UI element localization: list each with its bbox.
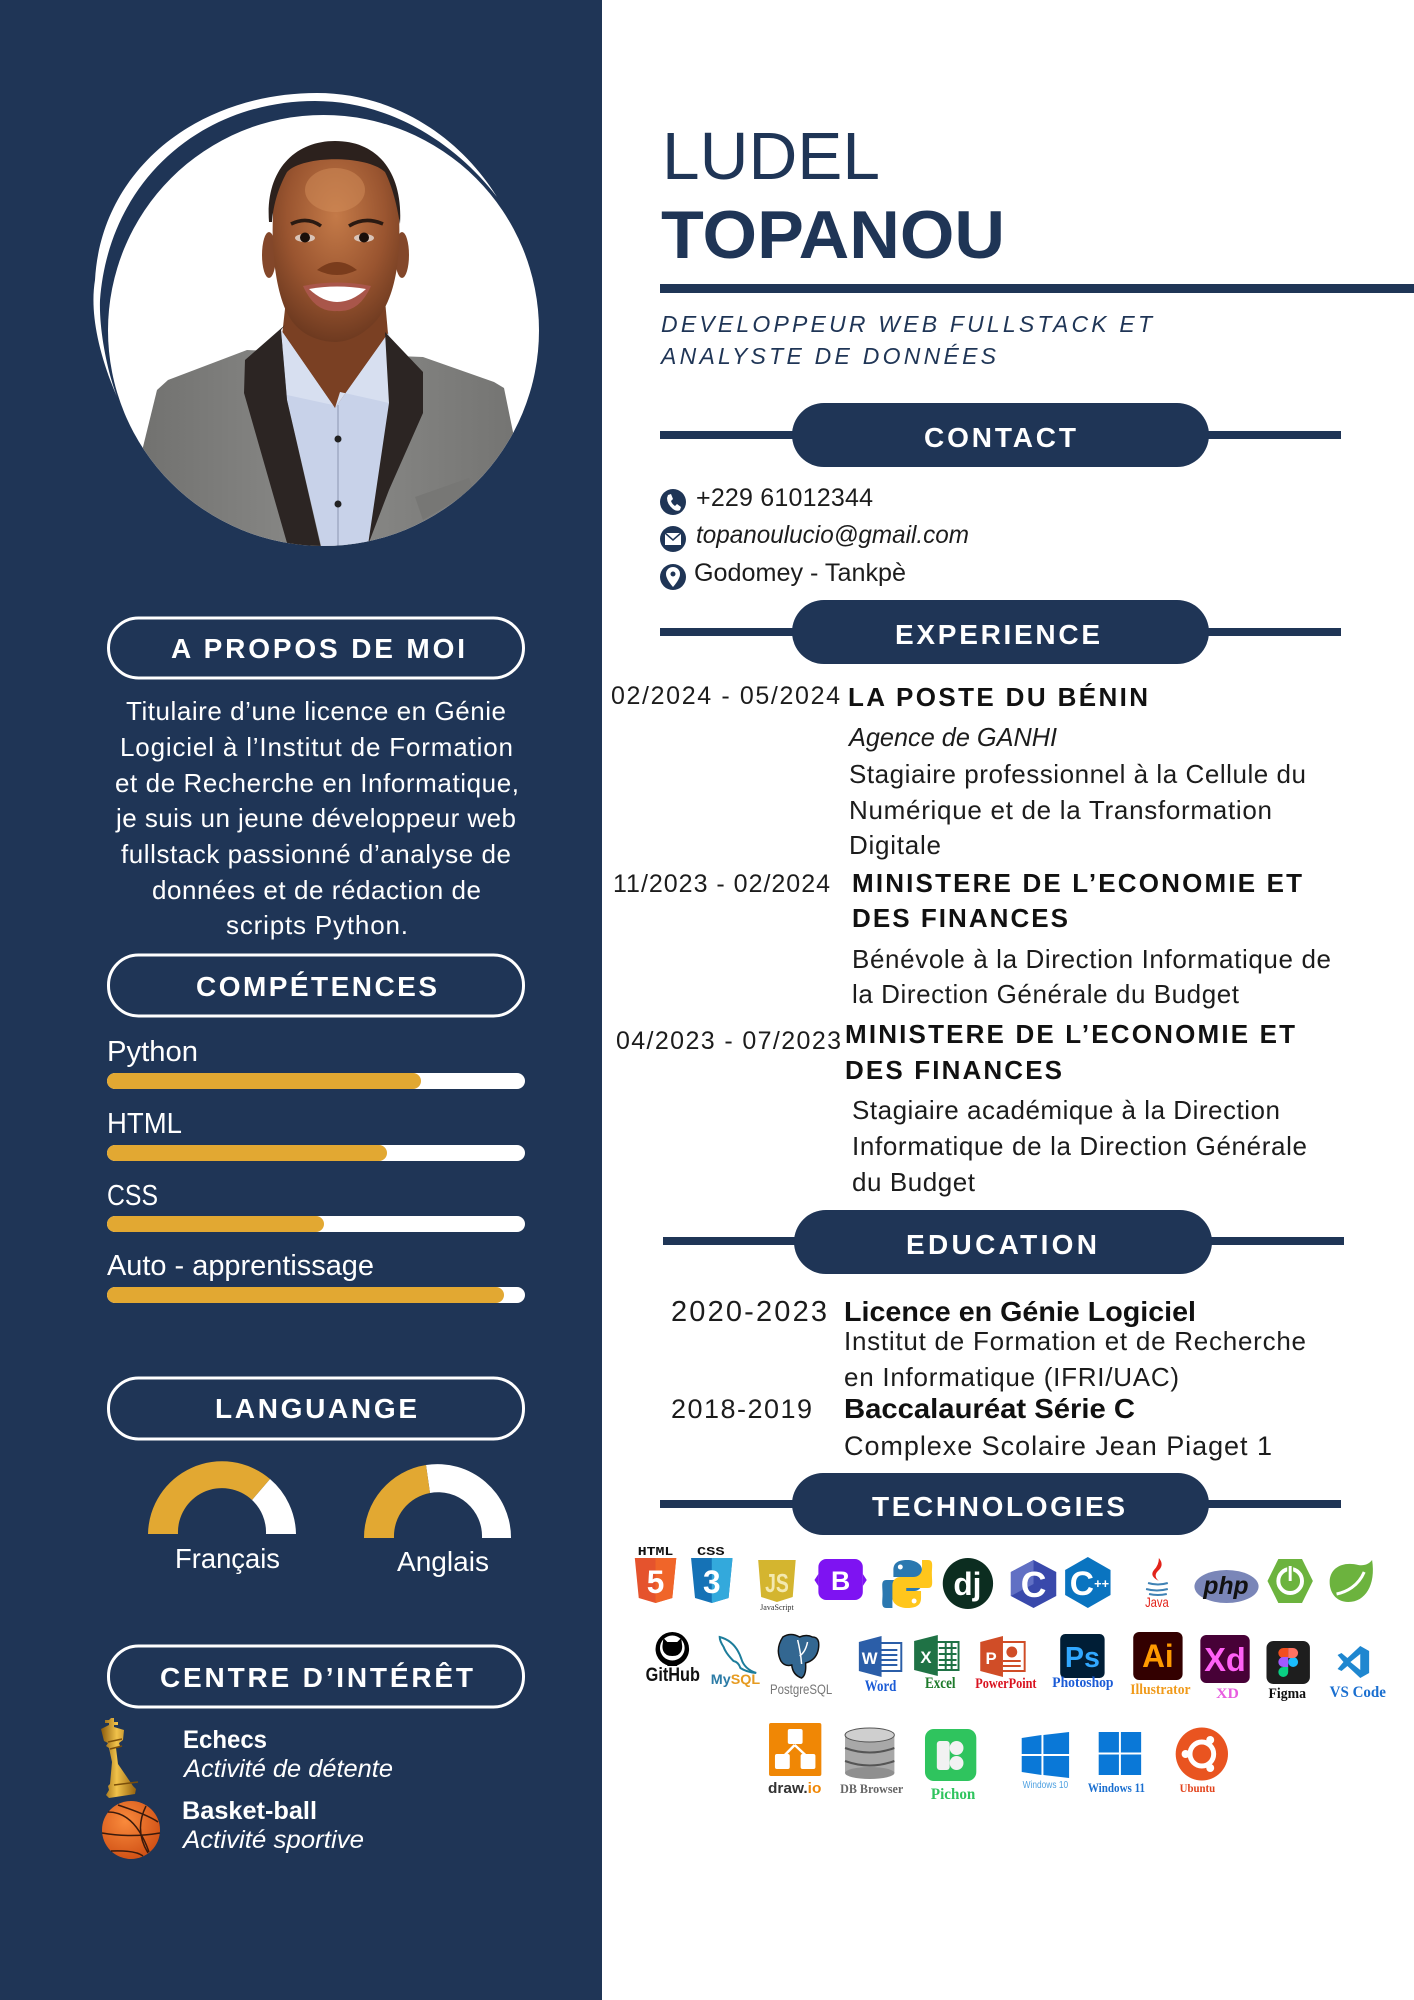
icon: Java: Java [1145, 1594, 1169, 1610]
text block: a propos: je suis un jeune développeur web [115, 803, 516, 833]
title: name [661, 119, 1005, 273]
icon: basketball [102, 1801, 160, 1859]
section band: technologies [660, 1473, 1341, 1535]
icon: C++ [1065, 1557, 1111, 1608]
icon: C [1011, 1560, 1056, 1608]
experience: ministere benevole: Bénévole à la Direction Informatique de [852, 944, 1331, 974]
heading: a propos de moi [108, 618, 524, 678]
skill: HTML [107, 1108, 525, 1161]
skill: auto-apprentissage: Auto - apprentissage [107, 1250, 374, 1282]
icon: draw.io [768, 1723, 821, 1797]
divider under name [660, 284, 1414, 293]
education: licence: en Informatique (IFRI/UAC) [844, 1362, 1179, 1392]
icon: PowerPoint [975, 1636, 1037, 1692]
skill bars [107, 1036, 525, 1303]
heading: a propos de moi: A PROPOS DE MOI [171, 633, 465, 664]
experience: ministere stagiaire: du Budget [852, 1167, 976, 1197]
interest: basket-ball: Activité sportive [181, 1826, 364, 1854]
technology logos [635, 1545, 1386, 1803]
experience: ministere benevole: 11/2023 - 02/2024 [613, 870, 830, 898]
icon: C++: C [1070, 1565, 1094, 1603]
heading: centre d'interet: CENTRE D’INTÉRÊT [160, 1662, 473, 1693]
icon: HTML5: HTML [638, 1545, 673, 1559]
icon: chess king [101, 1718, 138, 1798]
icon: HTML5: 5 [647, 1564, 664, 1600]
icon: Django [943, 1558, 993, 1609]
gauge: francais: Français [175, 1543, 280, 1574]
decorative crescent ring [93, 93, 497, 397]
experience: la poste du benin [611, 682, 1306, 860]
icon: draw.io: draw.io [768, 1781, 821, 1797]
experience: ministere stagiaire: Informatique de la Direction Générale [852, 1131, 1307, 1161]
experience: ministere benevole: la Direction Générale du Budget [852, 979, 1240, 1009]
icon: Bootstrap [814, 1559, 867, 1600]
icon: Photoshop: Photoshop [1052, 1675, 1114, 1691]
icon: Bootstrap: B [831, 1566, 850, 1596]
interest: echecs: Activité de détente [182, 1755, 393, 1783]
experience: ministere benevole [613, 868, 1331, 1009]
icon: JavaScript: JS [765, 1570, 789, 1598]
icon: GitHub [646, 1632, 700, 1685]
icon: DB Browser [840, 1728, 904, 1796]
icon: Word: W [862, 1649, 878, 1668]
icon: PHP [1194, 1570, 1259, 1603]
contact: email: topanoulucio@gmail.com [696, 521, 969, 549]
icon: MySQL [711, 1637, 761, 1687]
icon: Django: dj [953, 1566, 981, 1602]
icon: PowerPoint: PowerPoint [975, 1676, 1037, 1692]
heading: languange: LANGUANGE [215, 1393, 417, 1424]
education: licence: 2020-2023 [671, 1296, 827, 1328]
experience: ministere stagiaire [616, 1019, 1307, 1197]
subtitle [659, 311, 1154, 369]
icon: GitHub: GitHub [646, 1664, 700, 1685]
title: name: TOPANOU [661, 197, 1005, 273]
text block: a propos: fullstack passionné d’analyse de [121, 839, 511, 869]
section band: experience [660, 600, 1341, 664]
experience: la poste du benin: 02/2024 - 05/2024 [611, 682, 840, 710]
icon: Illustrator: Illustrator [1130, 1682, 1191, 1698]
icon: Python [882, 1560, 932, 1608]
text block: a propos: Titulaire d’une licence en Génie [126, 696, 506, 726]
education: baccalaureat: Complexe Scolaire Jean Piaget 1 [844, 1431, 1272, 1461]
experience: la poste du benin: Numérique et de la Transformation [849, 795, 1272, 825]
icon: Illustrator: Ai [1142, 1638, 1174, 1674]
education: baccalaureat: 2018-2019 [671, 1394, 812, 1424]
text block: a propos: scripts Python. [226, 910, 408, 940]
section band: contact [660, 403, 1341, 467]
icon: Java [1145, 1558, 1169, 1610]
icon: Spring Boot [1267, 1559, 1313, 1603]
icon: Photoshop: Ps [1065, 1642, 1100, 1674]
subtitle: ANALYSTE DE DONNÉES [659, 343, 997, 369]
experience: ministere stagiaire: 04/2023 - 07/2023 [616, 1027, 841, 1055]
icon: Excel [914, 1635, 959, 1692]
icon: Figma: Figma [1268, 1686, 1306, 1702]
text block: a propos [115, 696, 519, 940]
icon: VS Code [1330, 1646, 1386, 1701]
education: baccalaureat: Baccalauréat Série C [844, 1393, 1135, 1424]
contact: phone: +229 61012344 [696, 484, 873, 512]
profile photo [93, 93, 555, 560]
section band: technologies: TECHNOLOGIES [872, 1491, 1125, 1522]
icon: Adobe XD [1200, 1635, 1250, 1702]
interest: echecs: Echecs [183, 1726, 267, 1754]
text block: a propos: données et de rédaction de [152, 875, 481, 905]
skill: Python: Python [107, 1036, 198, 1068]
experience: la poste du benin: Agence de GANHI [847, 722, 1057, 752]
icon: Ubuntu: Ubuntu [1180, 1781, 1215, 1795]
experience: ministere stagiaire: Stagiaire académique à la Direction [852, 1095, 1280, 1125]
icon: JavaScript [758, 1560, 796, 1612]
title: name: LUDEL [662, 119, 880, 194]
education: licence [671, 1296, 1306, 1392]
photo circle with portrait [108, 115, 539, 546]
icon: Excel: Excel [925, 1675, 956, 1692]
icon: Pichon [925, 1729, 976, 1803]
education: licence: Institut de Formation et de Recherche [844, 1326, 1306, 1356]
icon: Windows 11: Windows 11 [1088, 1780, 1145, 1795]
section band: contact: CONTACT [924, 422, 1076, 453]
gauge: anglais: Anglais [397, 1546, 489, 1577]
experience: la poste du benin: LA POSTE DU BÉNIN [848, 682, 1148, 712]
gauge: anglais [364, 1464, 511, 1577]
heading: competences [108, 955, 524, 1016]
icon: DB Browser: DB Browser [840, 1781, 904, 1796]
icon: PHP: php [1202, 1573, 1249, 1600]
icon: Windows 11 [1088, 1732, 1145, 1795]
icon: Spring leaf [1330, 1560, 1373, 1602]
skill: CSS: CSS [107, 1180, 158, 1212]
icon: CSS3 [691, 1545, 733, 1603]
interest: basket-ball [181, 1797, 364, 1854]
icon: Illustrator [1130, 1632, 1191, 1698]
experience: la poste du benin: Stagiaire professionnel à la Cellule du [849, 759, 1306, 789]
icon: C++: ++ [1094, 1576, 1110, 1591]
experience: ministere benevole: DES FINANCES [852, 903, 1068, 933]
panel: left sidebar [0, 0, 602, 2000]
interest: echecs [182, 1726, 393, 1783]
section band: experience: EXPERIENCE [895, 619, 1100, 650]
icon: HTML5 [635, 1545, 676, 1603]
icon: PostgreSQL [770, 1634, 832, 1697]
heading: competences: COMPÉTENCES [196, 971, 437, 1002]
icon: Ubuntu [1176, 1728, 1228, 1795]
experience: la poste du benin: Digitale [849, 830, 941, 860]
icon: Adobe XD: XD [1216, 1686, 1239, 1702]
icon: PostgreSQL: PostgreSQL [770, 1681, 832, 1697]
section band: education: EDUCATION [906, 1229, 1097, 1260]
icon: PowerPoint: P [986, 1649, 997, 1668]
gauge: francais [148, 1461, 296, 1574]
icon: CSS3: CSS [697, 1545, 725, 1559]
icon: Windows 10 [1022, 1732, 1069, 1791]
text block: a propos: et de Recherche en Informatique, [115, 768, 519, 798]
icon: VS Code: VS Code [1330, 1684, 1386, 1701]
education: baccalaureat [671, 1393, 1272, 1461]
icon: C: C [1021, 1565, 1046, 1605]
skill: auto-apprentissage [107, 1250, 525, 1303]
icon: Word [859, 1636, 901, 1695]
icon: Photoshop [1052, 1634, 1114, 1691]
icon: JavaScript: JavaScript [760, 1603, 795, 1612]
interest: basket-ball: Basket-ball [182, 1797, 317, 1825]
education: licence: Licence en Génie Logiciel [844, 1296, 1196, 1327]
icon: Excel: X [920, 1648, 932, 1667]
contact list [660, 484, 969, 590]
heading: centre d'interet [108, 1646, 524, 1707]
icon: Figma [1266, 1641, 1310, 1702]
icon: Windows 10: Windows 10 [1023, 1780, 1068, 1791]
icon: Adobe XD: Xd [1204, 1641, 1246, 1678]
skill: CSS [107, 1180, 525, 1232]
experience: ministere stagiaire: MINISTERE DE L’ECONOMIE ET [845, 1019, 1295, 1049]
contact: location: Godomey - Tankpè [694, 559, 906, 587]
icon: MySQL: MySQL [711, 1671, 761, 1687]
skill: Python [107, 1036, 525, 1089]
subtitle: DEVELOPPEUR WEB FULLSTACK ET [661, 311, 1154, 337]
heading: languange [108, 1378, 524, 1439]
skill: HTML: HTML [107, 1108, 182, 1140]
icon: CSS3: 3 [703, 1564, 721, 1600]
icon: Word: Word [865, 1678, 896, 1695]
experience: ministere stagiaire: DES FINANCES [845, 1055, 1062, 1085]
icon: Pichon: Pichon [931, 1786, 975, 1803]
text block: a propos: Logiciel à l’Institut de Formation [120, 732, 513, 762]
experience: ministere benevole: MINISTERE DE L’ECONOMIE ET [852, 868, 1302, 898]
section band: education [663, 1210, 1344, 1274]
